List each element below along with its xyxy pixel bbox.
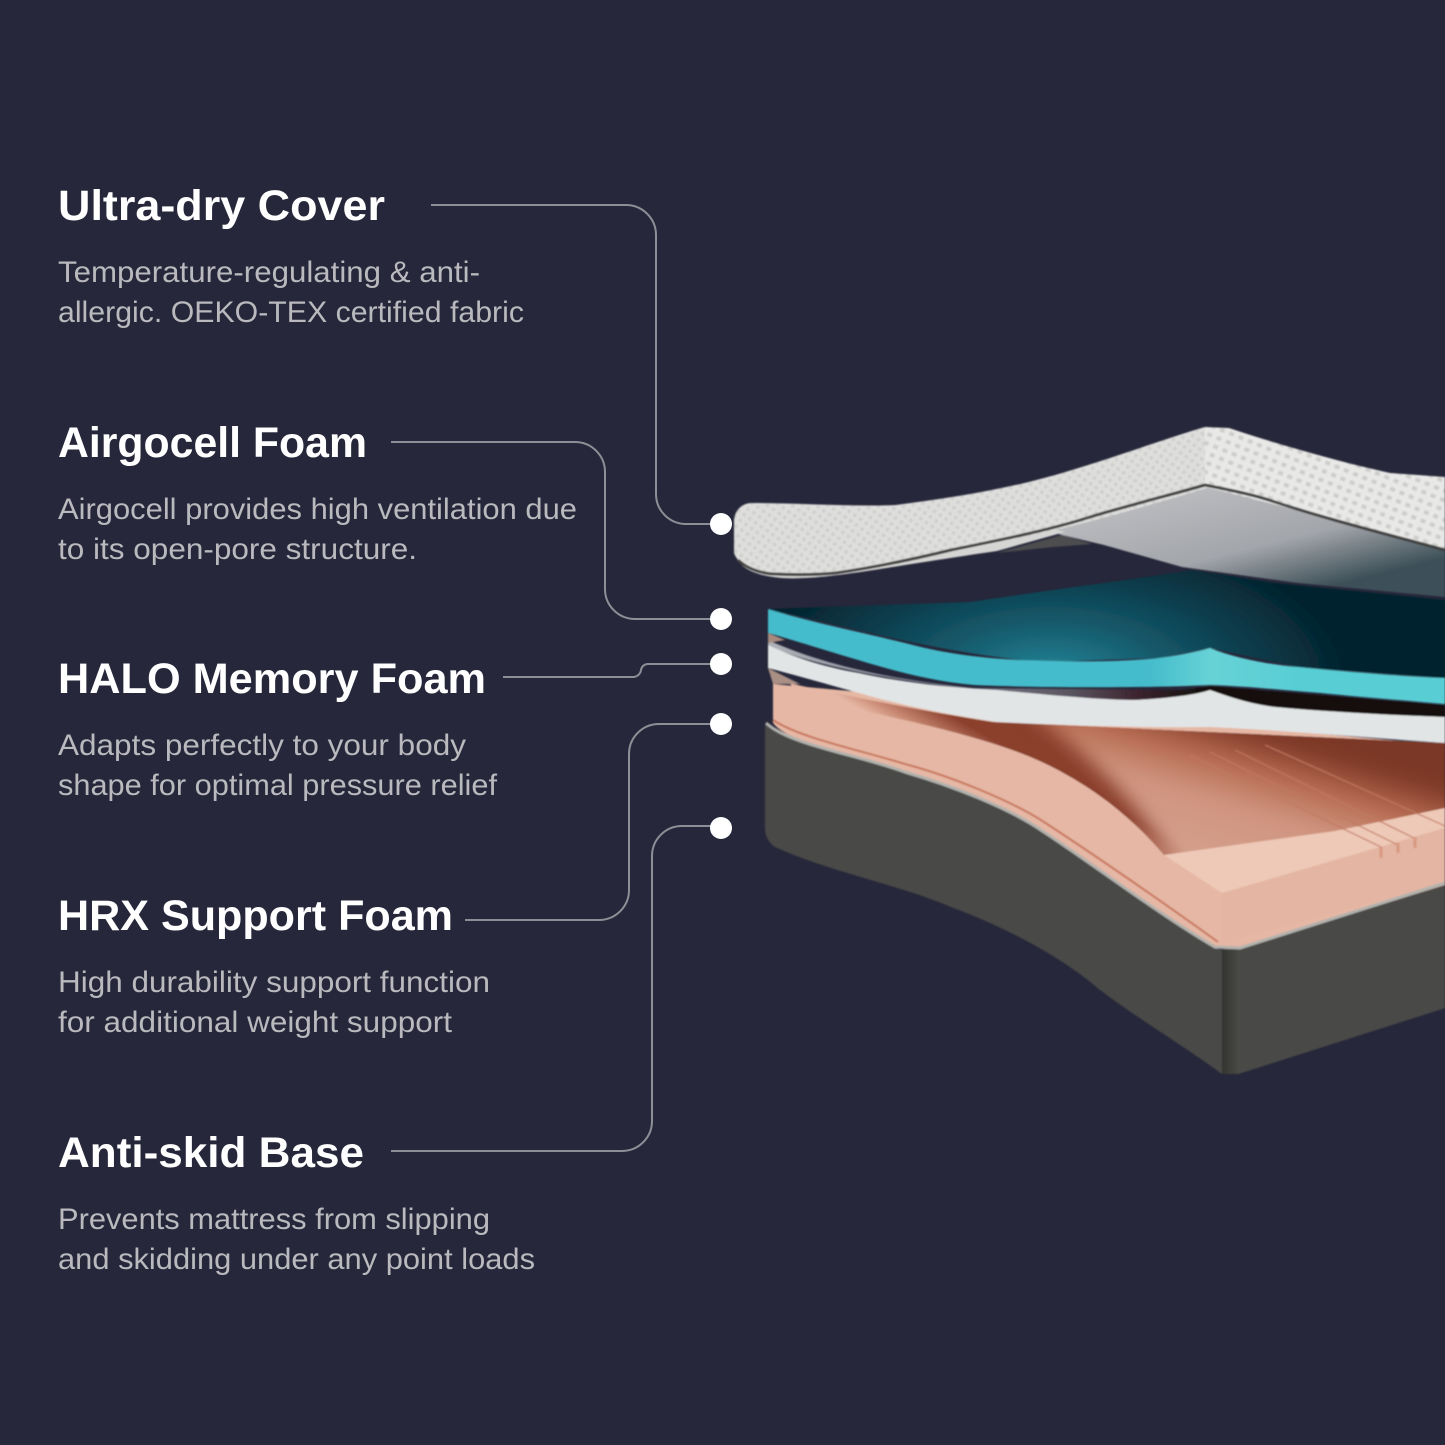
description: and skidding under any point loads (58, 1243, 535, 1276)
description: High durability support function (58, 966, 490, 999)
layer: HALO memory foam (768, 633, 1445, 743)
description: Prevents mattress from slipping (58, 1203, 490, 1236)
marker dot: hrx support foam (710, 713, 732, 735)
edge trim (773, 720, 1218, 942)
description: to its open-pore structure. (58, 533, 417, 566)
layer: anti-skid base (765, 725, 1445, 1074)
description: Airgocell provides high ventilation due (58, 493, 577, 526)
description: Temperature-regulating & anti- (58, 256, 480, 289)
mattress illustration (734, 427, 1445, 1074)
description (58, 493, 577, 566)
callout line: airgocell foam (391, 442, 721, 619)
description: allergic. OEKO-TEX certified fabric (58, 296, 524, 329)
text block: anti-skid base (58, 1129, 535, 1276)
description: shape for optimal pressure relief (58, 769, 498, 802)
layer: ultra-dry cover (734, 427, 1445, 597)
description (58, 1203, 535, 1276)
text block: ultra-dry cover (58, 182, 524, 329)
heading: HALO Memory Foam (58, 655, 486, 703)
heading: Anti-skid Base (58, 1129, 364, 1177)
heading: HRX Support Foam (58, 892, 453, 940)
heading: Airgocell Foam (58, 419, 367, 467)
callout line: halo memory foam (503, 664, 721, 677)
marker dot: ultra-dry cover (710, 513, 732, 535)
callout line: hrx support foam (465, 724, 721, 920)
marker dot: halo memory foam (710, 653, 732, 675)
layer: HRX support foam (766, 675, 1445, 948)
text block: halo memory foam (58, 655, 498, 802)
description (58, 966, 490, 1039)
callout line: ultra-dry cover (431, 205, 721, 524)
marker dot: anti-skid base (710, 817, 732, 839)
marker dot: airgocell foam (710, 608, 732, 630)
description (58, 729, 498, 802)
text block: airgocell foam (58, 419, 577, 566)
description (58, 256, 524, 329)
heading: Ultra-dry Cover (58, 182, 385, 230)
description: Adapts perfectly to your body (58, 729, 466, 762)
layer: airgocell foam (768, 570, 1445, 704)
description: for additional weight support (58, 1006, 453, 1039)
callout line: anti-skid base (391, 826, 721, 1151)
text block: hrx support foam (58, 892, 490, 1039)
foam channels (1190, 745, 1445, 858)
